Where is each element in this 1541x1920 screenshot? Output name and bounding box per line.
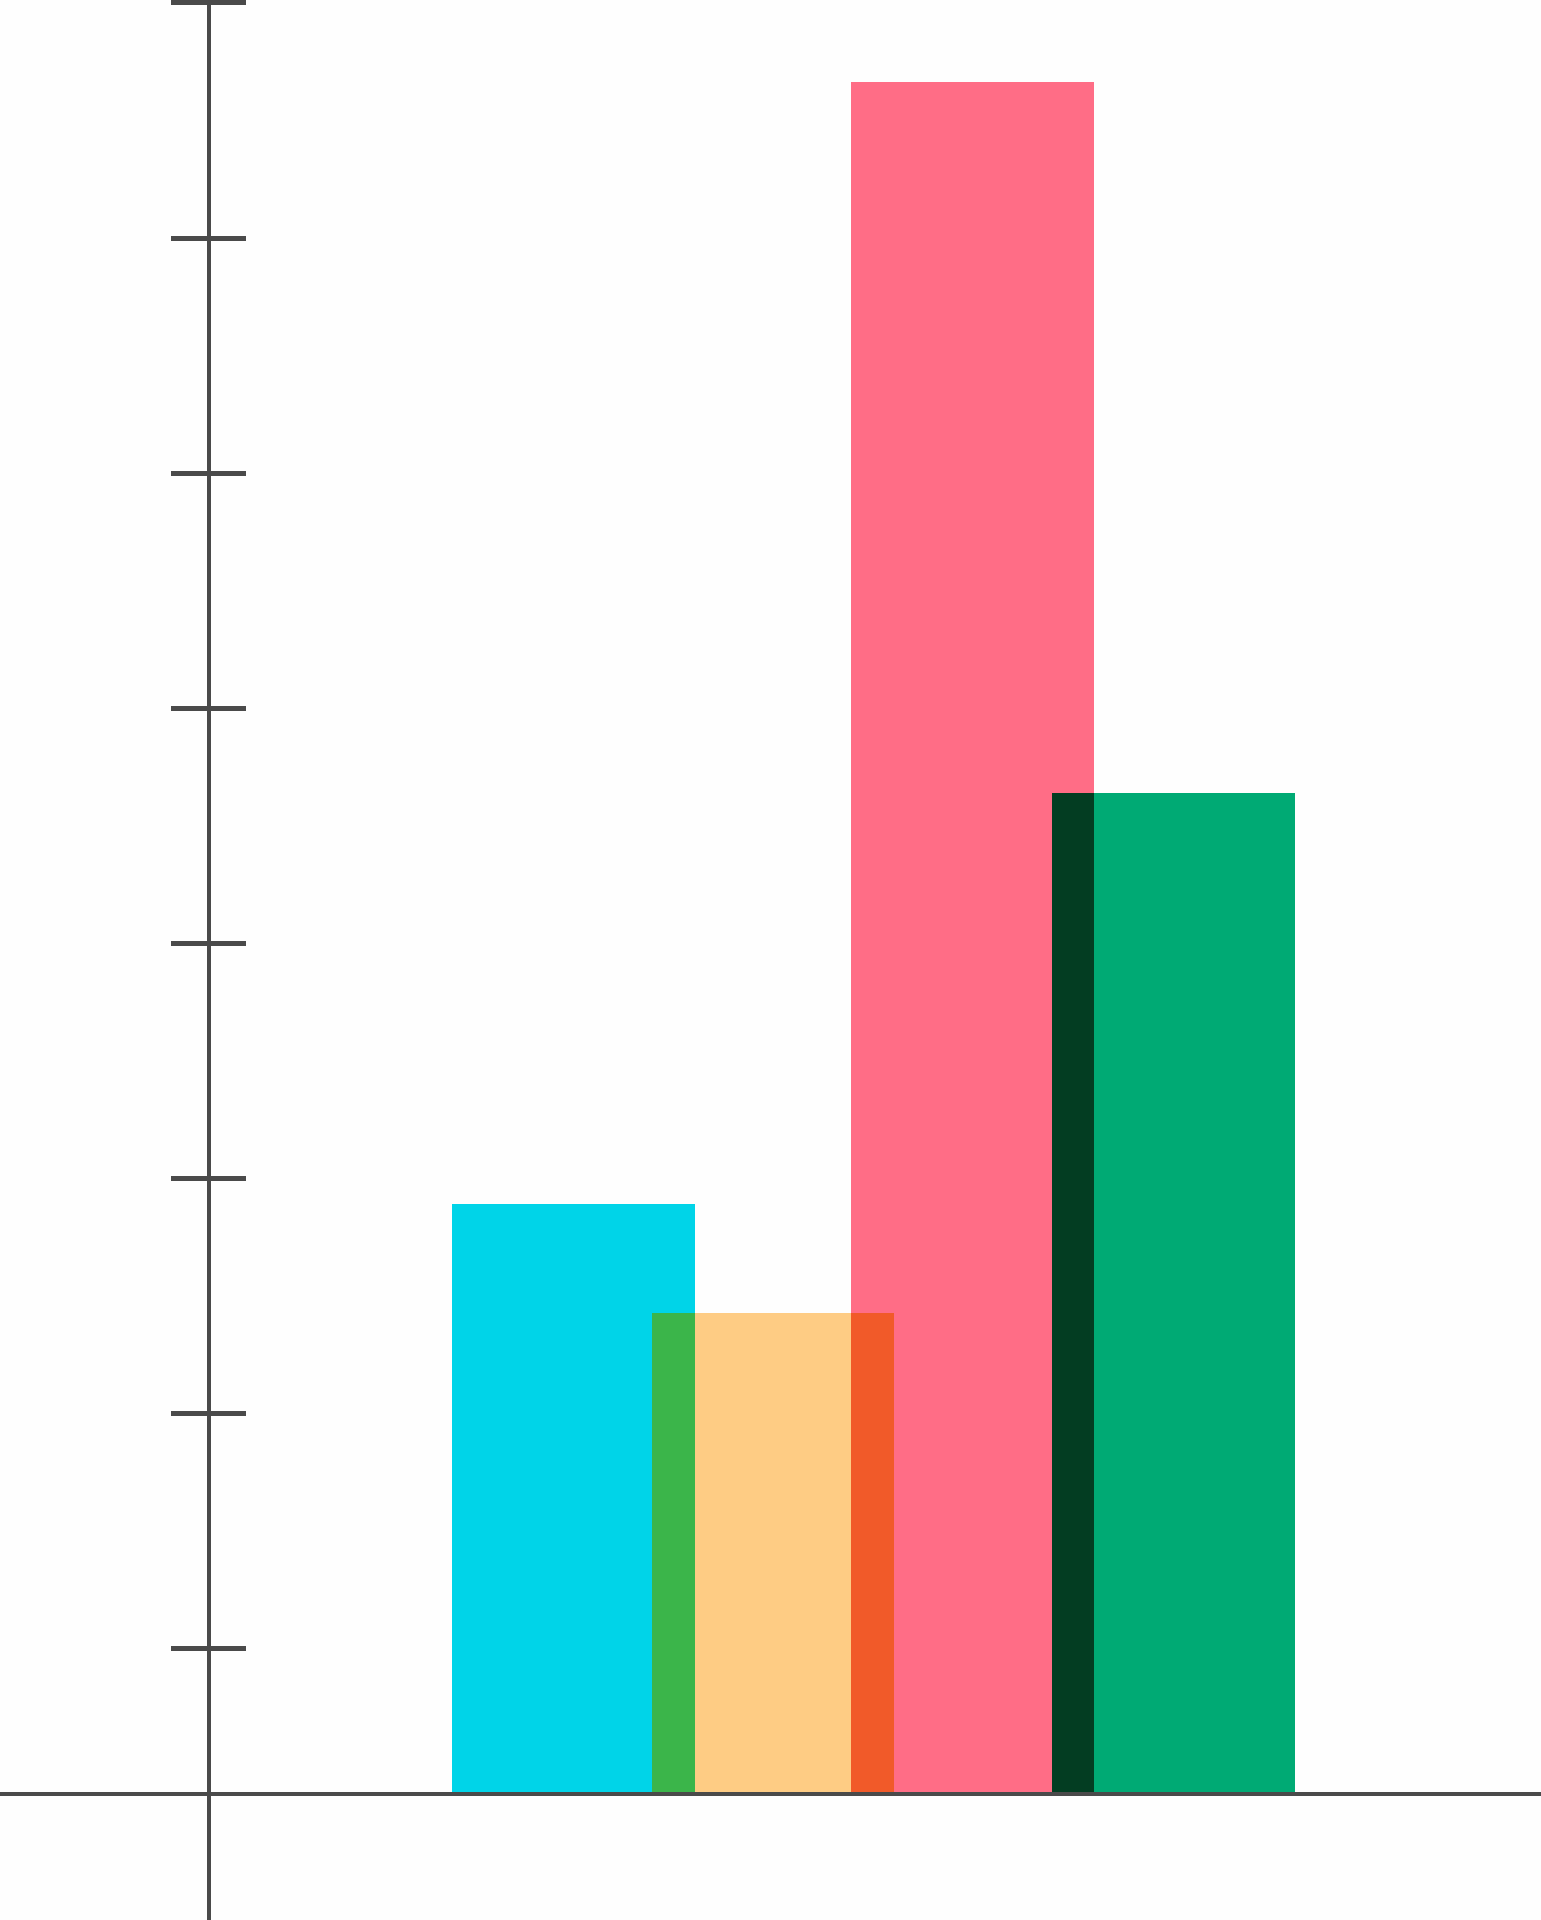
bar: green [1052,793,1295,1794]
bars [452,82,1295,1794]
bar: cyan [452,1204,695,1794]
bar: yellow [652,1313,894,1794]
overlap: pink-green [1052,793,1094,1794]
overlap: yellow-pink [851,1313,894,1794]
overlap: cyan-yellow [652,1313,695,1794]
bar: pink [851,82,1094,1794]
